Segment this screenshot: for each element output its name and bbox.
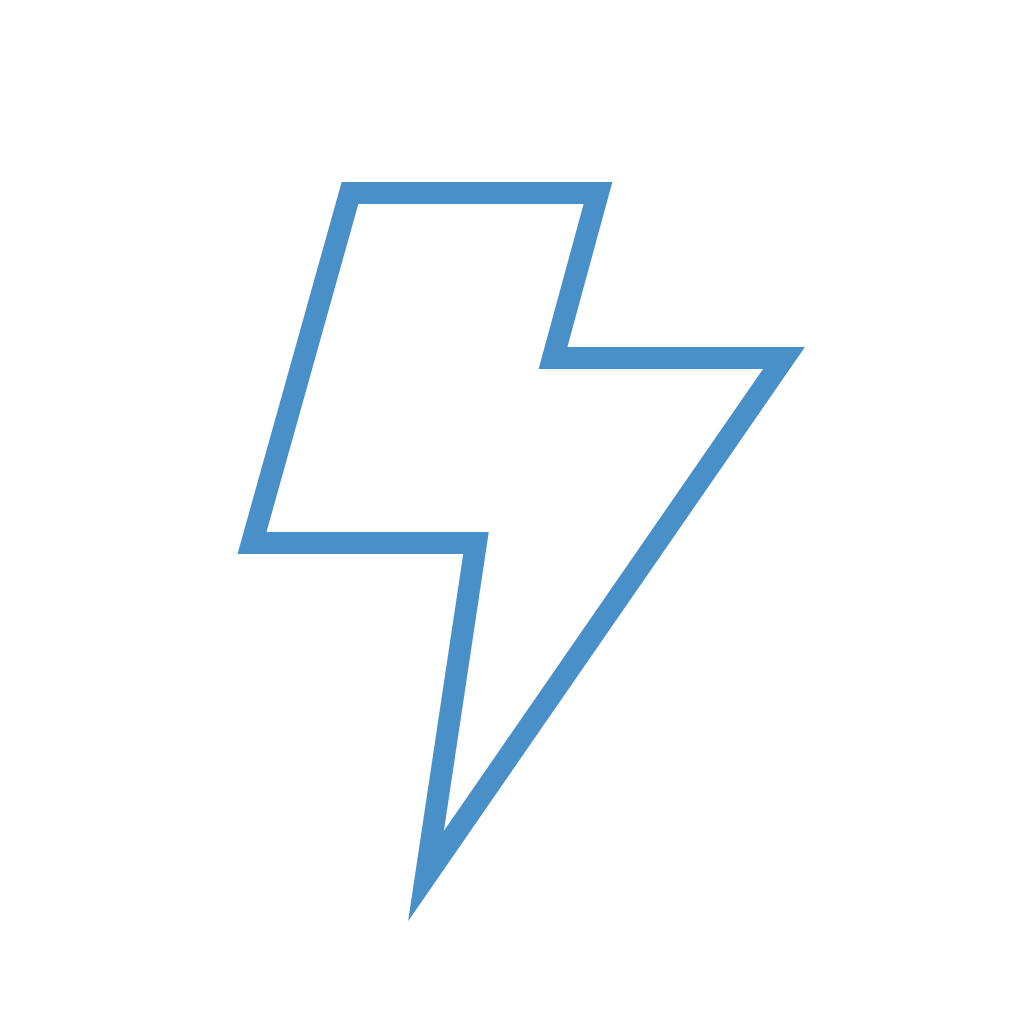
icon: lightning bolt outline [252, 193, 784, 876]
